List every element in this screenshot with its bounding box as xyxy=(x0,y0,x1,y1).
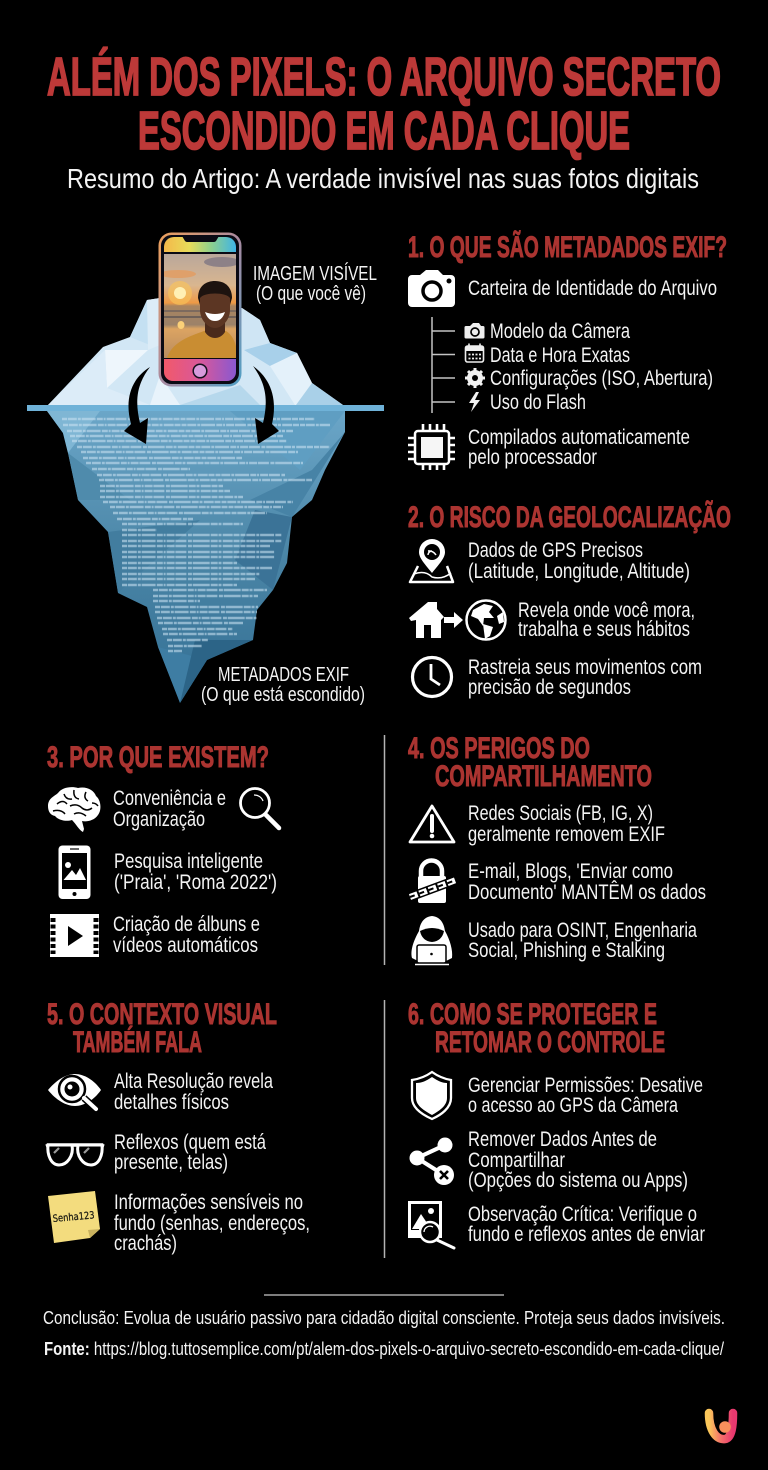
text: convenience: Conveniência e xyxy=(113,787,226,810)
arrow right xyxy=(253,366,279,444)
heading 3: 3. POR QUE EXISTEM? xyxy=(47,741,269,774)
text: reveals: trabalha e seus hábitos xyxy=(518,618,690,641)
text: albums: vídeos automáticos xyxy=(113,934,258,957)
text: OSINT: Usado para OSINT, Engenharia xyxy=(468,919,697,942)
heading 6 xyxy=(408,998,665,1059)
icon: share remove xyxy=(410,1138,454,1185)
text: email blogs: E-mail, Blogs, 'Enviar como xyxy=(468,860,673,883)
text: social networks: Redes Sociais (FB, IG, X) xyxy=(468,802,653,825)
text: convenience: Organização xyxy=(113,808,205,831)
icon: lock and chain xyxy=(410,861,456,903)
text: GPS xyxy=(468,539,690,583)
text: tracks: precisão de segundos xyxy=(468,676,631,699)
phone xyxy=(158,232,242,386)
text: social networks: geralmente removem EXIF xyxy=(468,823,665,846)
heading 5: 5. O CONTEXTO VISUAL xyxy=(47,998,277,1031)
text: search: ('Praia', 'Roma 2022') xyxy=(114,871,277,894)
icon: brain xyxy=(48,787,100,832)
water line xyxy=(27,405,384,411)
icon: image inspection xyxy=(408,1201,454,1248)
text: sensitive information: crachás) xyxy=(114,1232,177,1255)
text: reveals: Revela onde você mora, xyxy=(518,599,695,622)
icon: clock xyxy=(412,658,452,696)
label: hidden metadata: METADADOS EXIF xyxy=(218,663,349,686)
panel: section 1 xyxy=(408,230,727,470)
text: critical observation: fundo e reflexos antes de enviar xyxy=(468,1223,705,1246)
icon: GPS map pin xyxy=(410,539,453,582)
selfie photo xyxy=(160,254,240,358)
heading 5: TAMBÉM FALA xyxy=(73,1025,202,1059)
list: metadata: Modelo da Câmera xyxy=(490,320,630,343)
icon: globe xyxy=(466,600,506,640)
title xyxy=(47,47,721,161)
text: albums: Criação de álbuns e xyxy=(113,913,260,936)
icon: sticky note xyxy=(48,1191,100,1243)
text: reflections: presente, telas) xyxy=(114,1151,228,1174)
icon: arrow xyxy=(444,612,463,628)
text: high resolution xyxy=(114,1070,273,1114)
icon: calendar xyxy=(466,344,484,362)
panel: section 3 xyxy=(47,741,279,957)
arrow left xyxy=(124,367,150,444)
text: OSINT: Social, Phishing e Stalking xyxy=(468,939,665,962)
tree connector xyxy=(432,317,455,413)
list: metadata: Configurações (ISO, Abertura) xyxy=(490,367,713,390)
text: social networks xyxy=(468,802,665,846)
text: compiled: pelo processador xyxy=(468,446,597,469)
iceberg body under water xyxy=(47,411,345,703)
text: critical observation: Observação Crítica: Verifique o xyxy=(468,1203,697,1226)
text: sensitive information xyxy=(114,1191,310,1255)
panel: section 2 xyxy=(408,500,731,699)
text: sensitive information: Informações sensíveis no xyxy=(114,1191,303,1214)
icon: house xyxy=(409,602,444,638)
text: reflections: Reflexos (quem está xyxy=(114,1131,266,1154)
label: visible image: IMAGEM VISÍVEL xyxy=(253,262,377,285)
label: visible image: (O que você vê) xyxy=(256,282,366,305)
heading 4: 4. OS PERIGOS DO xyxy=(408,732,590,765)
heading 4 xyxy=(408,732,652,793)
text: email blogs: Documento' MANTÊM os dados xyxy=(468,881,706,904)
text: albums xyxy=(113,913,260,957)
text: high resolution: detalhes físicos xyxy=(114,1091,229,1114)
iceberg illustration xyxy=(27,232,384,703)
text: compiled xyxy=(468,426,690,469)
panel: section 6 xyxy=(408,998,705,1248)
text: reveals xyxy=(518,599,695,641)
list: metadata xyxy=(490,320,713,414)
icon: small camera xyxy=(464,323,484,338)
icon: hacker xyxy=(411,916,452,964)
icon: glasses xyxy=(47,1144,103,1165)
text: email blogs xyxy=(468,860,706,904)
iceberg tip above water xyxy=(48,298,343,405)
panel: section 4 xyxy=(408,732,706,964)
text: GPS: Dados de GPS Precisos xyxy=(468,539,643,562)
text: compiled: Compilados automaticamente xyxy=(468,426,690,449)
label: visible image xyxy=(253,262,377,305)
icon: processor xyxy=(408,424,455,470)
text: remove data: Compartilhar xyxy=(468,1149,565,1172)
label: hidden metadata: (O que está escondido) xyxy=(201,683,365,706)
heading 4: COMPARTILHAMENTO xyxy=(435,760,652,793)
text: permissions xyxy=(468,1074,703,1117)
icon: magnifier xyxy=(240,788,279,828)
label: hidden metadata xyxy=(201,663,365,706)
list: metadata: Data e Hora Exatas xyxy=(490,344,630,367)
text: remove data: (Opções do sistema ou Apps) xyxy=(468,1169,688,1192)
list: metadata: Uso do Flash xyxy=(490,391,586,414)
text: permissions: Gerenciar Permissões: Desative xyxy=(468,1074,703,1097)
text: sensitive information: fundo (senhas, endereços, xyxy=(114,1212,310,1235)
icon: warning xyxy=(410,806,454,842)
icon: film strip xyxy=(50,914,99,957)
text: tracks: Rastreia seus movimentos com xyxy=(468,656,702,679)
text: tracks xyxy=(468,656,702,699)
text: search xyxy=(114,850,277,894)
icon: camera xyxy=(408,270,455,307)
icon: sticky note: Senha123 xyxy=(52,1210,95,1225)
icon: phone with picture xyxy=(58,846,90,899)
icon: eye with magnifier xyxy=(48,1074,101,1109)
panel: section 5 xyxy=(47,998,310,1255)
text: OSINT xyxy=(468,919,697,962)
text: GPS: (Latitude, Longitude, Altitude) xyxy=(468,560,690,583)
text: reflections xyxy=(114,1131,266,1174)
text: high resolution: Alta Resolução revela xyxy=(114,1070,273,1093)
text: search: Pesquisa inteligente xyxy=(114,850,263,873)
text: remove data: Remover Dados Antes de xyxy=(468,1128,657,1151)
text: remove data xyxy=(468,1128,688,1192)
text: convenience xyxy=(113,787,226,831)
heading 5 xyxy=(47,998,277,1059)
icon: shield xyxy=(412,1072,451,1119)
text: critical observation xyxy=(468,1203,705,1246)
home button xyxy=(193,364,207,378)
logo xyxy=(709,1413,733,1439)
icon: flash xyxy=(469,392,480,412)
text: permissions: o acesso ao GPS da Câmera xyxy=(468,1094,678,1117)
icon: gear xyxy=(465,368,485,388)
